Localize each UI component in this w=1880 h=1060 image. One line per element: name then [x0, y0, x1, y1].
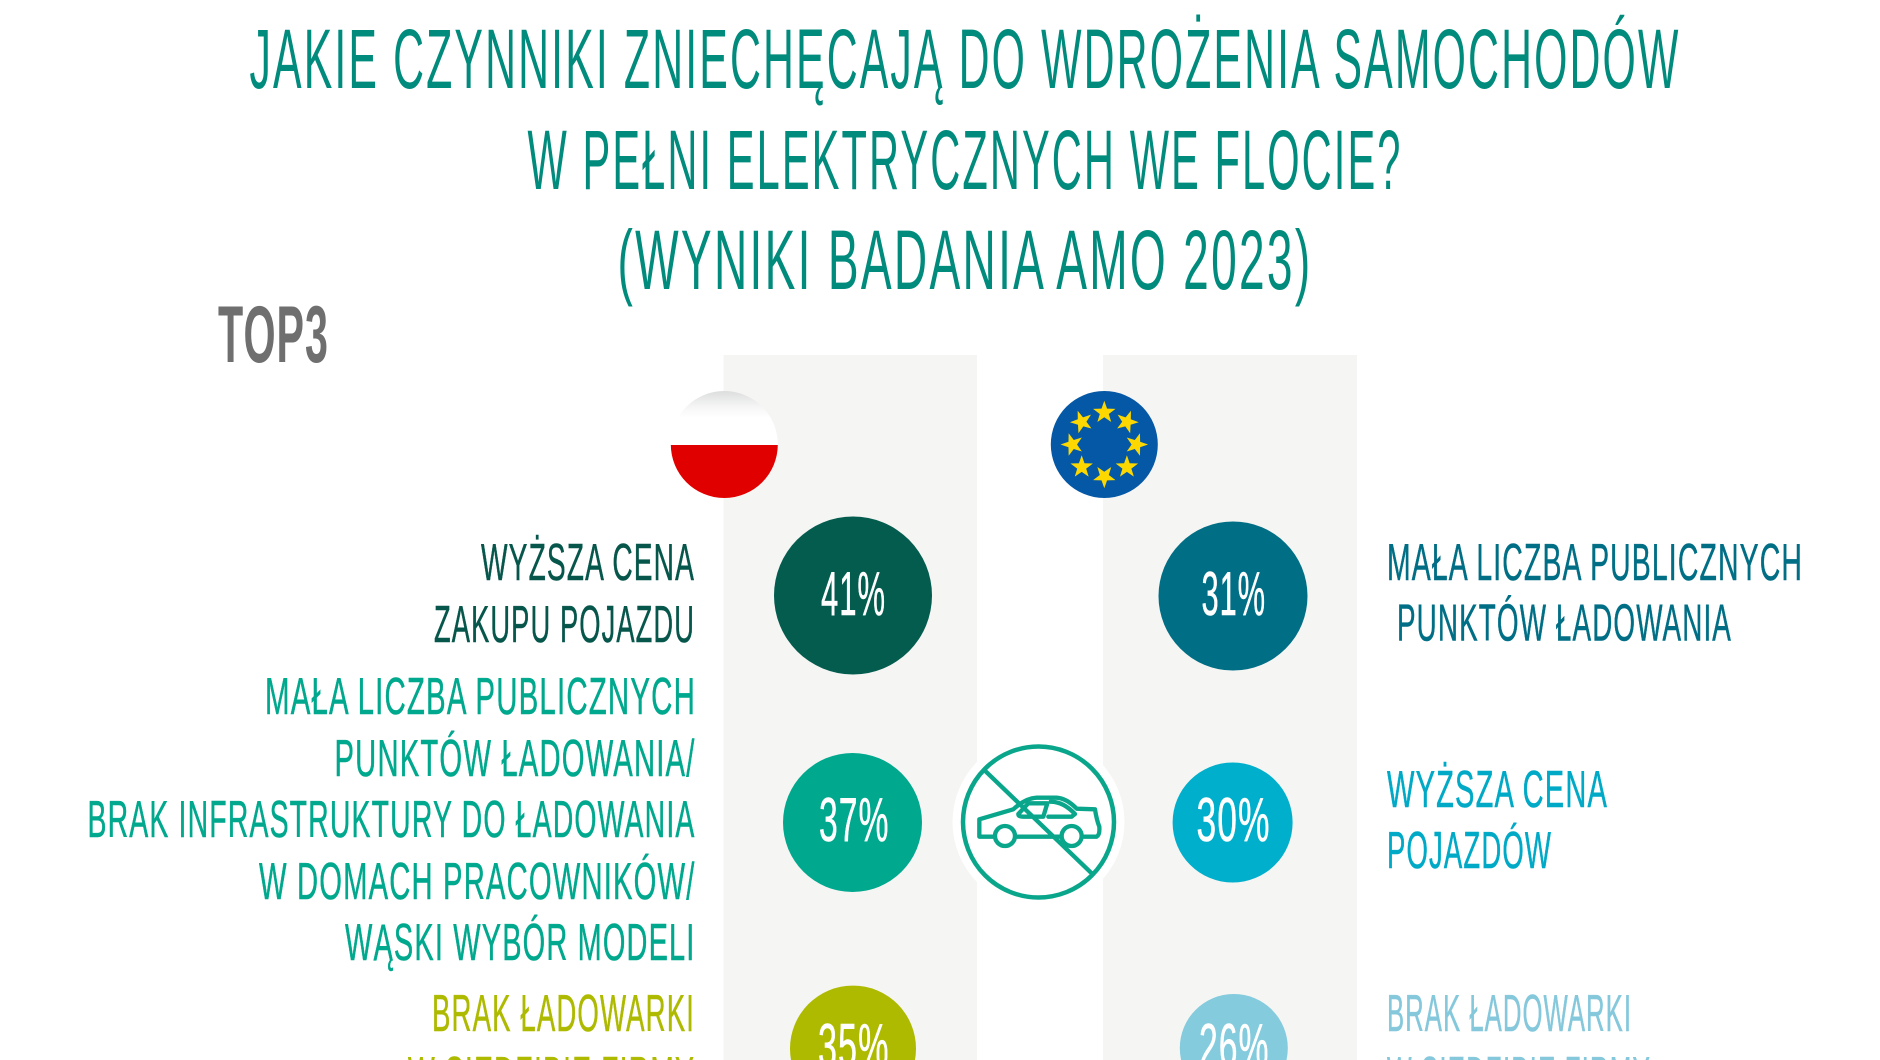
- title: (WYNIKI BADANIA AMO 2023): [618, 213, 1312, 307]
- bubble: EU 31%: [1158, 522, 1308, 670]
- label: Poland first reason: [434, 534, 695, 654]
- label: EU second reason: [1387, 761, 1608, 880]
- label: EU second reason: POJAZDÓW: [1387, 822, 1552, 880]
- icon: Polish flag: [670, 391, 778, 499]
- label: EU third reason: BRAK ŁADOWARKI: [1387, 985, 1632, 1043]
- label: EU first reason: [1387, 534, 1803, 652]
- bubble: EU 30%: [1173, 762, 1293, 882]
- label: Poland third reason: BRAK ŁADOWARKI: [432, 985, 695, 1043]
- label: Poland first reason: ZAKUPU POJAZDU: [434, 596, 695, 654]
- label: Poland second reason: PUNKTÓW ŁADOWANIA/: [334, 730, 696, 788]
- panel: EU column: [1103, 355, 1357, 1060]
- heading: TOP3: TOP3: [218, 290, 329, 380]
- label: Poland first reason: WYŻSZA CENA: [481, 534, 695, 592]
- label: EU second reason: WYŻSZA CENA: [1387, 761, 1608, 819]
- bubble: EU 26%: [1180, 994, 1288, 1060]
- title: [250, 12, 1681, 307]
- bubble: Poland 37%: [783, 753, 922, 892]
- label: Poland second reason: [88, 668, 696, 972]
- panel: Poland column: [724, 355, 977, 1060]
- label: Poland second reason: WĄSKI WYBÓR MODELI: [345, 914, 696, 972]
- label: EU third reason: [1387, 985, 1651, 1060]
- bubble: Poland 41%: 41%: [821, 560, 886, 629]
- label: Poland third reason: [408, 985, 695, 1060]
- icon: EU flag: [1051, 391, 1158, 498]
- bubble: EU 31%: 31%: [1202, 560, 1266, 629]
- label: Poland second reason: W DOMACH PRACOWNIKÓW/: [259, 853, 696, 911]
- bubble: Poland 41%: [774, 516, 932, 674]
- bubble: Poland 35%: [790, 986, 916, 1060]
- bubble: Poland 37%: 37%: [819, 786, 890, 855]
- bubble: EU 30%: 30%: [1196, 786, 1270, 855]
- label: Poland second reason: BRAK INFRASTRUKTURY DO ŁADOWANIA: [88, 791, 696, 849]
- icon: no car sign: [952, 736, 1124, 908]
- label: Poland second reason: MAŁA LICZBA PUBLICZNYCH: [265, 668, 696, 726]
